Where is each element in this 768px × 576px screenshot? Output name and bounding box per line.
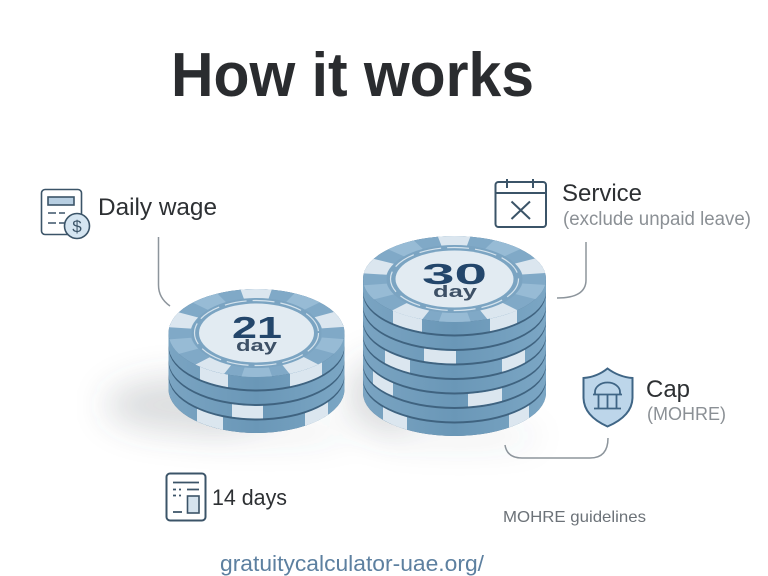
large chip stack: 30 day: [341, 226, 568, 436]
chip unit: day: day: [236, 336, 278, 355]
chip value: 30: 30: [422, 259, 487, 291]
connector: cap: [505, 438, 608, 458]
icon: document list: [166, 474, 206, 520]
footer url: gratuitycalculator-uae.org/: [220, 551, 485, 576]
chip value: 21: 21: [232, 310, 282, 345]
note: MOHRE: (MOHRE): [647, 404, 726, 424]
label: 14 days: 14 days: [212, 485, 287, 510]
source note: MOHRE guidelines: [503, 509, 646, 526]
icon: shield with bank: [584, 368, 632, 426]
stack shadows: [105, 357, 540, 444]
icon: calculator with dollar: $: [72, 217, 82, 236]
note: exclude unpaid leave: (exclude unpaid leave): [563, 209, 751, 230]
connector: service: [557, 242, 586, 298]
chip unit: day: day: [433, 282, 478, 301]
connector: daily wage: [158, 237, 170, 306]
label: service: Service: [562, 180, 642, 207]
small chip stack: 21 day: [148, 279, 365, 433]
icon: calendar with cross: [496, 179, 546, 227]
title: How it works: [171, 41, 534, 110]
label: daily wage: Daily wage: [98, 194, 217, 221]
icon: calculator with dollar: [42, 190, 90, 238]
label: cap: Cap: [646, 376, 690, 403]
